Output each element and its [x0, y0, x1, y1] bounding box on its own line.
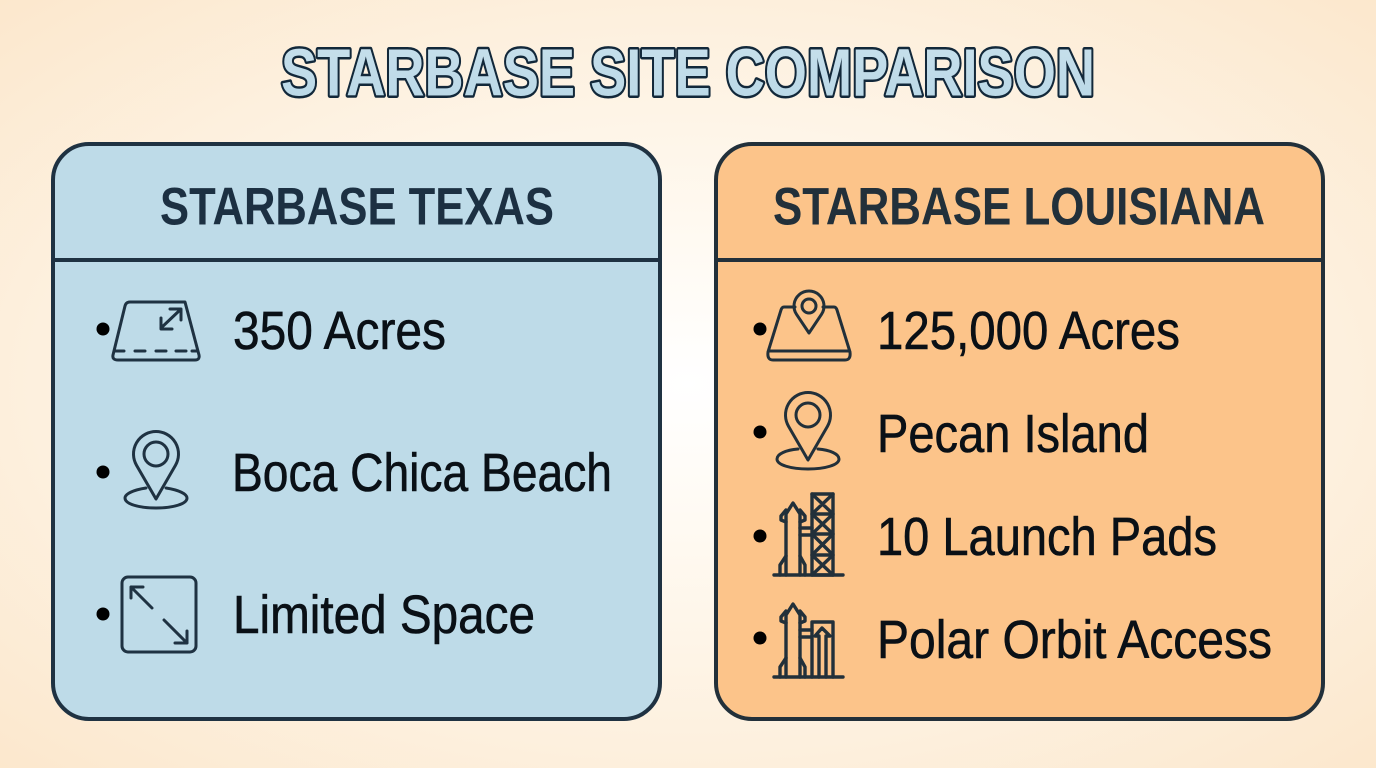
- row: 350 Acres: 350 Acres: [233, 301, 446, 361]
- icon: location pin: [777, 393, 839, 469]
- row: Boca Chica Beach: Boca Chica Beach: [232, 443, 612, 503]
- row: 350 Acres: [96, 301, 446, 361]
- row: 10 Launch Pads: 10 Launch Pads: [877, 507, 1217, 567]
- panel: Starbase Texas: [53, 144, 660, 719]
- icon: land area with expand arrow: [113, 302, 199, 360]
- heading: Starbase Louisiana: STARBASE LOUISIANA: [773, 178, 1265, 236]
- row: Limited Space: [96, 577, 535, 652]
- icon: location pin: [125, 432, 187, 508]
- row: Polar Orbit Access: [754, 604, 1272, 677]
- row: Pecan Island: Pecan Island: [877, 404, 1149, 464]
- icon: square with expand arrows: [122, 577, 196, 652]
- icon: land plot with pin: [768, 291, 850, 360]
- icon: rocket and polar arrow: [774, 604, 843, 677]
- row: Pecan Island: [754, 393, 1149, 469]
- row: 125,000 Acres: 125,000 Acres: [877, 301, 1180, 361]
- row: Boca Chica Beach: [96, 432, 612, 508]
- title: STARBASE SITE COMPARISON: [281, 36, 1095, 110]
- row: 10 Launch Pads: [754, 494, 1217, 575]
- heading: Starbase Texas: STARBASE TEXAS: [160, 178, 554, 236]
- panel: Starbase Louisiana: [716, 144, 1323, 719]
- row: Limited Space: Limited Space: [233, 585, 535, 645]
- row: Polar Orbit Access: Polar Orbit Access: [877, 610, 1272, 670]
- row: 125,000 Acres: [754, 291, 1180, 361]
- icon: rocket and launch tower: [774, 494, 843, 575]
